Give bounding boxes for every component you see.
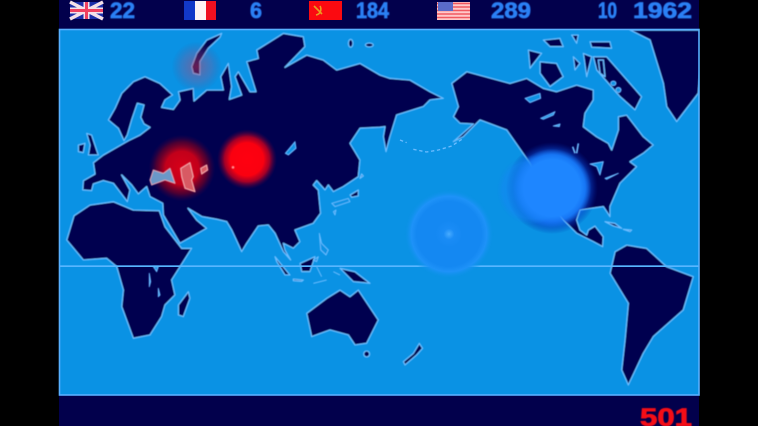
detonation glow: US west bbox=[502, 156, 540, 222]
icon: USSR flag bbox=[309, 1, 342, 20]
Balkhash spot bbox=[232, 166, 234, 169]
detonation glow: Novaya Zemlya bbox=[174, 44, 219, 89]
Indonesian islands bbox=[313, 267, 340, 283]
Baikal bbox=[285, 142, 296, 155]
Hudson Bay interior islands bbox=[611, 81, 616, 86]
Tasmania bbox=[364, 351, 370, 357]
panel: world map bbox=[59, 29, 703, 395]
Aleutian chain bbox=[400, 138, 463, 152]
footer bar bbox=[59, 395, 699, 426]
Winnipeg lakes bbox=[573, 143, 578, 153]
Great Bear and Slave lakes bbox=[525, 93, 560, 127]
South America bbox=[610, 245, 693, 385]
Java bbox=[293, 279, 303, 281]
New Zealand bbox=[403, 343, 423, 365]
islands and lakes bbox=[149, 81, 621, 297]
Africa bbox=[67, 202, 192, 338]
Philippines bbox=[313, 233, 328, 262]
Australia bbox=[307, 290, 378, 345]
icon: France flag bbox=[184, 1, 216, 20]
Borneo bbox=[300, 257, 315, 272]
Eurasia bbox=[83, 33, 443, 260]
detonation glow: Pacific ring bbox=[408, 194, 490, 274]
equator line bbox=[59, 265, 699, 267]
Greenland bbox=[630, 30, 703, 122]
map frame bbox=[60, 30, 699, 395]
Great Lakes bbox=[590, 162, 618, 179]
British Isles bbox=[78, 133, 98, 155]
icon: UK flag bbox=[70, 2, 103, 19]
Japan islands bbox=[332, 198, 350, 215]
Novaya Zemlya bbox=[192, 33, 222, 75]
detonation halo over land: Nevada bbox=[506, 142, 598, 234]
header bar bbox=[59, 0, 699, 29]
New Guinea bbox=[340, 268, 370, 283]
Arctic islands bbox=[528, 35, 642, 110]
detonation glow: western USSR bbox=[149, 135, 215, 201]
detonation glow: Semipalatinsk bbox=[217, 129, 277, 189]
Aral Sea bbox=[201, 165, 208, 174]
Caspian Sea bbox=[181, 163, 195, 192]
detonation glow: Nevada bbox=[517, 150, 590, 225]
Arctic Russian islands bbox=[348, 39, 353, 47]
Madagascar bbox=[178, 292, 190, 317]
Japan bbox=[350, 174, 363, 197]
North America bbox=[452, 72, 653, 247]
land masses bbox=[67, 30, 703, 385]
Sumatra bbox=[275, 257, 290, 275]
Black Sea bbox=[150, 168, 175, 185]
Caribbean islands bbox=[605, 222, 632, 232]
African lakes bbox=[149, 267, 160, 297]
icon: USA flag bbox=[437, 2, 470, 20]
inland seas tinted by glow bbox=[150, 163, 234, 192]
